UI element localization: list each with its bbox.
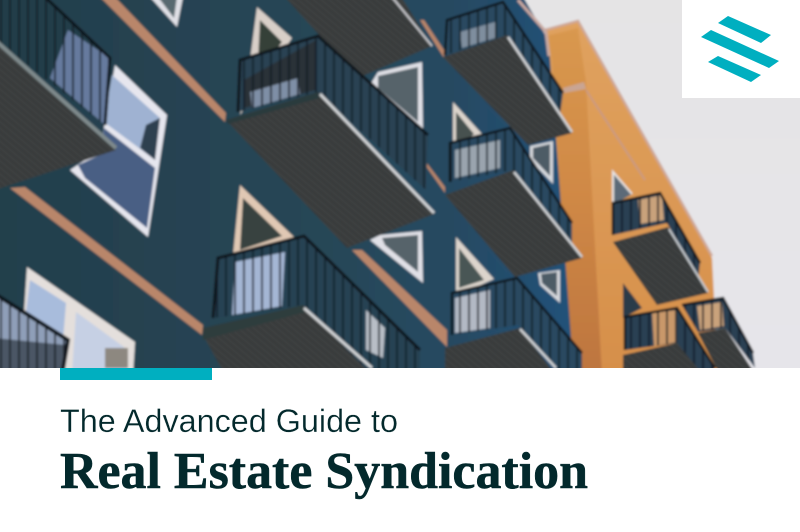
balcony: bottom left xyxy=(0,294,68,375)
window: top left xyxy=(150,0,183,27)
balcony: orange upper xyxy=(613,193,708,305)
window: lower center xyxy=(233,185,294,255)
roof edge of blue building xyxy=(518,0,549,56)
orange wall bands xyxy=(10,0,447,347)
white title panel xyxy=(0,368,800,532)
blue building wall xyxy=(0,0,574,375)
balcony: middle right xyxy=(445,128,582,277)
balcony: top left xyxy=(0,0,116,190)
window: large left xyxy=(70,65,167,237)
window: right upper xyxy=(370,62,423,132)
window: upper center xyxy=(240,7,292,115)
window: far right lower xyxy=(456,237,494,296)
window: far right upper xyxy=(451,100,484,143)
photo: apartment buildings xyxy=(0,0,800,375)
balcony: orange lower right xyxy=(682,298,756,375)
balcony: upper center xyxy=(226,36,434,248)
title line two: Real Estate Syndication xyxy=(60,443,588,500)
balcony: top center xyxy=(283,0,432,78)
balcony: lower right xyxy=(445,278,582,375)
orange building xyxy=(545,21,718,375)
window: narrow lower xyxy=(538,270,560,303)
logo tile xyxy=(682,0,800,98)
balcony: upper right xyxy=(443,2,572,145)
icon: three diagonal stripes logo xyxy=(701,16,779,82)
sky xyxy=(523,0,800,368)
teal accent bar xyxy=(60,368,212,380)
window: narrow upper xyxy=(530,141,553,184)
balcony: orange lower left xyxy=(623,308,718,375)
title line one: The Advanced Guide to xyxy=(60,403,398,439)
windows xyxy=(20,0,560,375)
balcony: lower center xyxy=(203,236,420,375)
window: bottom left xyxy=(20,267,135,375)
window: right middle xyxy=(370,231,423,283)
